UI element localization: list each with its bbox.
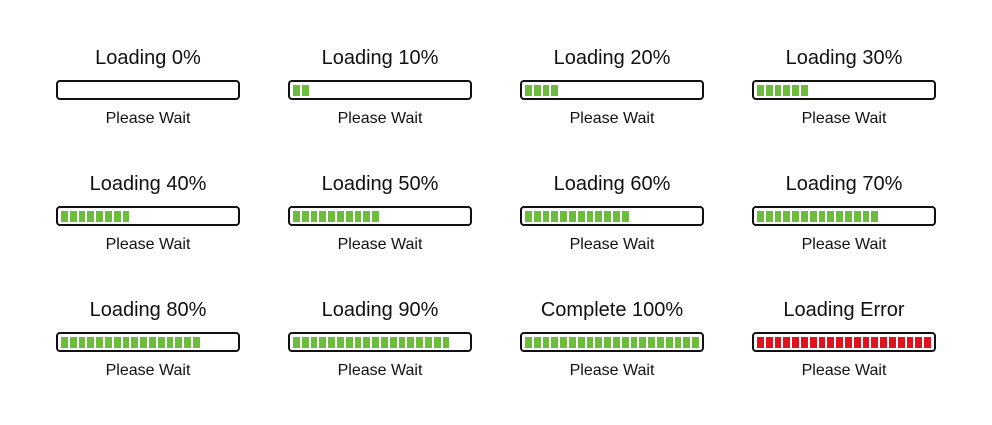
- text: Loading 20%: [554, 47, 670, 69]
- text: Please Wait: [802, 110, 886, 127]
- text: Loading Error: [783, 299, 905, 321]
- text: Loading 40%: [90, 173, 206, 195]
- text: Please Wait: [338, 362, 422, 379]
- text: Please Wait: [570, 236, 654, 253]
- cell: loading 70: [752, 173, 936, 253]
- text: Loading 0%: [95, 47, 201, 69]
- cell: loading error: [752, 299, 936, 379]
- text: Please Wait: [338, 236, 422, 253]
- cell: loading 30: [752, 47, 936, 127]
- text: Loading 70%: [786, 173, 902, 195]
- text: Please Wait: [802, 236, 886, 253]
- cell: loading 10: [288, 47, 472, 127]
- text: Please Wait: [106, 362, 190, 379]
- cell: loading 90: [288, 299, 472, 379]
- cell: loading 20: [520, 47, 704, 127]
- text: Loading 80%: [90, 299, 206, 321]
- cell: loading 0: [56, 47, 240, 127]
- text: Please Wait: [106, 110, 190, 127]
- text: Loading 30%: [786, 47, 902, 69]
- text: Loading 10%: [322, 47, 438, 69]
- text: Complete 100%: [541, 299, 683, 321]
- text: Please Wait: [106, 236, 190, 253]
- text: Please Wait: [338, 110, 422, 127]
- cell: loading 80: [56, 299, 240, 379]
- cell: loading 40: [56, 173, 240, 253]
- text: Please Wait: [570, 362, 654, 379]
- cell: loading 50: [288, 173, 472, 253]
- text: Please Wait: [570, 110, 654, 127]
- text: Loading 50%: [322, 173, 438, 195]
- text: Loading 60%: [554, 173, 670, 195]
- cell: complete 100: [520, 299, 704, 379]
- text: Loading 90%: [322, 299, 438, 321]
- text: Please Wait: [802, 362, 886, 379]
- cell: loading 60: [520, 173, 704, 253]
